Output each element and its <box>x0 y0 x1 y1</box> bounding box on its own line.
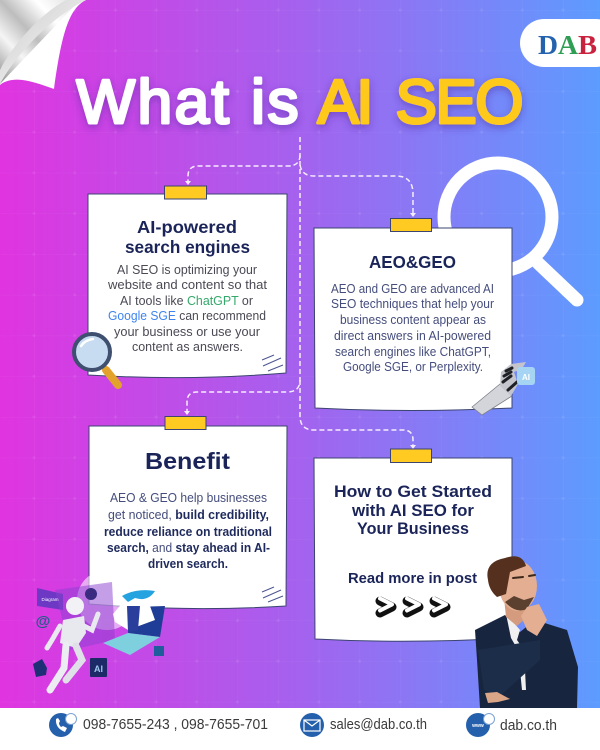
tape <box>390 218 432 232</box>
read more label: Read more in post <box>348 570 477 587</box>
title: SEO <box>396 68 524 137</box>
contact: email: sales@dab.co.th <box>330 717 427 733</box>
panel: How to Get Started: with AI SEO for <box>351 502 475 520</box>
tape <box>165 416 206 430</box>
page curl corner <box>0 0 86 89</box>
contact: phone <box>49 713 268 737</box>
panel: AI-powered search engines: website and content so that <box>107 278 268 292</box>
panel: Benefit: driven search. <box>148 557 228 571</box>
panel: Benefit <box>33 416 287 690</box>
icon: large magnifying glass <box>444 163 577 300</box>
heading: AEO&GEO <box>369 252 456 272</box>
panel: AI-powered search engines: your business or use your <box>114 325 260 339</box>
logo badge: D <box>538 30 558 60</box>
contact: website: dab.co.th <box>500 718 557 734</box>
tape <box>164 186 206 199</box>
heading: AI-powered <box>137 217 237 237</box>
panel: Benefit: get noticed, build credibility, <box>108 508 269 522</box>
heading: Benefit <box>145 448 230 474</box>
contact: website: www <box>471 723 484 729</box>
panel: How to Get Started <box>314 449 512 641</box>
panel: Benefit: reduce reliance on traditional <box>104 525 272 539</box>
panel: AEO and GEO: SEO techniques that help your <box>331 297 494 311</box>
panel: AI-powered search engines: AI tools like ChatGPT or <box>120 294 253 308</box>
hatch marks <box>262 355 283 371</box>
body text: AEO and GEO are advanced AI <box>331 282 494 296</box>
icon: small magnifier <box>74 334 118 385</box>
panel: AEO and GEO: direct answers in AI-powered <box>334 329 491 343</box>
panel: AI-powered search engines: Google SGE can recommend <box>108 309 266 323</box>
contact: email <box>300 713 427 737</box>
logo badge <box>520 19 600 67</box>
icon: triple chevrons <box>380 598 446 613</box>
tape <box>390 449 432 462</box>
footer bar <box>0 708 600 750</box>
logo badge: B <box>578 30 597 60</box>
illustration: robot and laptop: @ <box>36 613 50 630</box>
illustration: robot and laptop <box>33 570 165 690</box>
illustration: robot and laptop: AI <box>94 664 103 674</box>
panel: Benefit: search, and stay ahead in AI- <box>107 541 270 555</box>
contact: phone: 098-7655-243 , 098-7655-701 <box>83 717 268 733</box>
illustration: robot and laptop: Diagram <box>41 597 59 602</box>
dashed connector arrows <box>184 137 416 449</box>
panel: AEO and GEO <box>314 218 535 415</box>
illustration: thinking man <box>475 556 578 708</box>
panel: AEO and GEO: business content appear as <box>340 313 486 327</box>
panel: AEO and GEO: search engines like ChatGPT, <box>335 345 491 359</box>
body text: AI SEO is optimizing your <box>117 263 257 277</box>
title: What is <box>76 68 298 137</box>
heading: How to Get Started <box>334 483 492 501</box>
panel: AI-powered search engines: content as answers. <box>132 340 243 354</box>
title <box>76 68 524 137</box>
hatch marks <box>262 587 283 602</box>
body text: AEO & GEO help businesses <box>110 491 267 505</box>
icon: robot hand <box>472 362 535 415</box>
panel: AI-powered search engines: search engines <box>125 237 250 257</box>
icon: robot hand: AI <box>522 373 530 382</box>
panel: How to Get Started: Your Business <box>357 520 469 538</box>
title: AI <box>318 68 374 137</box>
logo badge: A <box>558 30 579 60</box>
panel: AI-powered search engines <box>74 186 287 385</box>
panel: AEO and GEO: Google SGE, or Perplexity. <box>343 360 483 374</box>
contact: website <box>466 713 557 737</box>
